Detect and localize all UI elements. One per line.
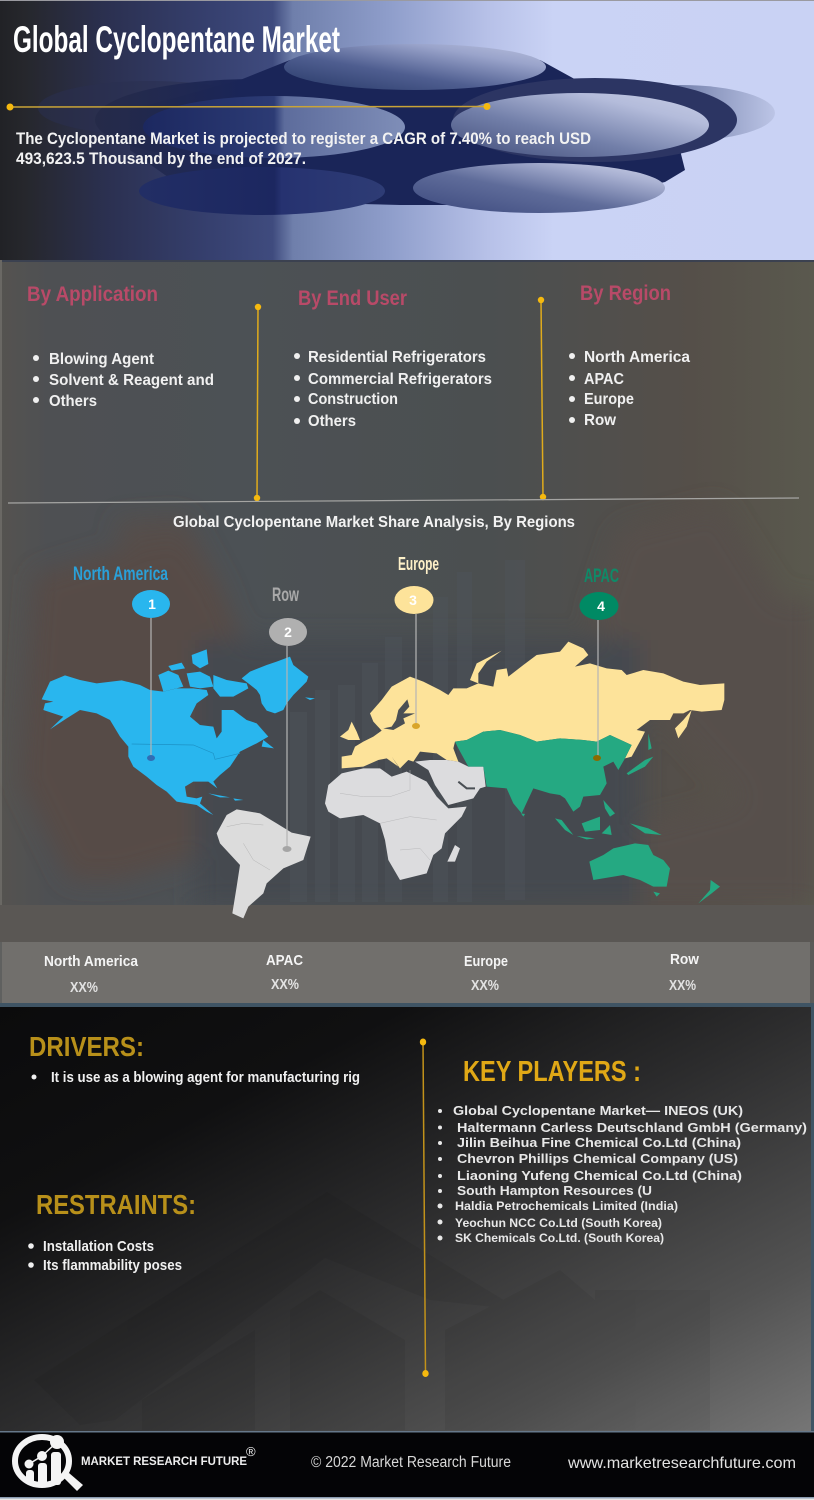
share: apac: XX%: [271, 976, 299, 993]
restraints: Installation Costs: [43, 1238, 154, 1255]
heading: by end user: By End User: [298, 287, 407, 310]
share: europe: XX%: [471, 977, 499, 994]
key players list: SK Chemicals Co.Ltd. (South Korea): [455, 1233, 664, 1245]
share: row: [669, 951, 699, 994]
panel: regional share strip: [0, 942, 814, 1007]
key players list: Chevron Phillips Chemical Company (US): [457, 1152, 738, 1166]
list: end user segments: [294, 349, 492, 430]
drivers: DRIVERS:: [29, 1031, 144, 1062]
share: apac: APAC: [266, 952, 303, 969]
share: europe: Europe: [464, 953, 508, 970]
key players list: Haltermann Carless Deutschland GmbH (Germany): [457, 1121, 807, 1135]
callout 4: apac: 4: [597, 598, 605, 614]
key players list: Global Cyclopentane Market— INEOS (UK): [453, 1104, 743, 1118]
share: apac: [266, 952, 303, 993]
share: row: Row: [670, 951, 699, 968]
molecule graphic: [38, 44, 775, 215]
panel: footer: [0, 1431, 814, 1500]
background photo: hands and bars: [0, 505, 814, 942]
map: south america: [217, 809, 311, 918]
registered mark: ®: [246, 1444, 256, 1459]
key players list: Yeochun NCC Co.Ltd (South Korea): [455, 1218, 662, 1230]
list: end user segments: Commercial Refrigerators: [308, 371, 492, 388]
panel: background photo section: [0, 260, 814, 1005]
heading: by application: By Application: [27, 283, 158, 306]
drivers: [29, 1031, 360, 1086]
callout 1: north america: 1: [148, 596, 156, 612]
map: asia pacific: [455, 730, 720, 903]
list: region segments: APAC: [584, 371, 624, 388]
callout 2: rest of world: Row: [272, 585, 299, 606]
list: application segments: Others: [49, 393, 97, 410]
intro text: The Cyclopentane Market is projected to register a CAGR of 7.40% to reach USD: [16, 130, 591, 148]
heading: by region: By Region: [580, 282, 671, 305]
map: europe and russia: [340, 642, 724, 768]
heading: market share analysis: Global Cyclopentane Market Share Analysis, By Regions: [173, 514, 575, 531]
panel: drivers, restraints and key players: [0, 1007, 814, 1432]
callout 1: north america: North America: [73, 564, 168, 585]
list: region segments: [569, 349, 690, 429]
share: row: XX%: [669, 977, 696, 994]
callout 4: apac: APAC: [584, 566, 619, 587]
callout 2: rest of world: 2: [284, 624, 292, 640]
drivers: It is use as a blowing agent for manufacturing rig: [51, 1069, 360, 1086]
key players list: South Hampton Resources (U: [457, 1184, 652, 1198]
panel: header banner: [0, 0, 814, 260]
intro text: [16, 130, 591, 168]
copyright: © 2022 Market Research Future: [311, 1454, 511, 1471]
callout 3: europe: 3: [409, 592, 417, 608]
restraints: [28, 1189, 196, 1274]
gold divider: [6, 103, 490, 110]
gold dividers between segment columns: [8, 297, 799, 503]
key players list: [438, 1104, 807, 1245]
chart: world map by region: [42, 554, 724, 918]
list: application segments: Blowing Agent: [49, 351, 154, 368]
title: Global Cyclopentane Market: [13, 19, 340, 60]
callout 3: europe: [394, 554, 439, 729]
key players heading: KEY PLAYERS :: [463, 1056, 641, 1088]
list: region segments: Row: [584, 412, 617, 429]
key players list: Liaoning Yufeng Chemical Co.Ltd (China): [457, 1169, 742, 1183]
list: end user segments: Residential Refrigerators: [308, 349, 486, 366]
list: region segments: North America: [584, 349, 690, 366]
key players list: Jilin Beihua Fine Chemical Co.Ltd (China): [457, 1136, 741, 1150]
callout 1: north america: [73, 564, 170, 761]
brand name: MARKET RESEARCH FUTURE: [81, 1454, 247, 1468]
share: north america: [44, 953, 139, 996]
list: end user segments: Others: [308, 413, 356, 430]
share: north america: North America: [44, 953, 139, 970]
list: region segments: Europe: [584, 391, 634, 408]
restraints: RESTRAINTS:: [36, 1189, 196, 1220]
logo mark: [15, 1435, 83, 1491]
callout 4: apac: [580, 566, 619, 761]
share: north america: XX%: [70, 979, 98, 996]
map: north america: [42, 649, 315, 815]
list: end user segments: Construction: [308, 391, 398, 408]
map: africa and middle east: [325, 760, 486, 880]
key players list: Haldia Petrochemicals Limited (India): [455, 1201, 678, 1213]
restraints: Its flammability poses: [43, 1257, 182, 1274]
list: application segments: Solvent & Reagent and: [49, 372, 214, 389]
intro text: 493,623.5 Thousand by the end of 2027.: [16, 150, 306, 168]
callout 2: rest of world: [269, 585, 307, 852]
share: europe: [464, 953, 508, 994]
website: www.marketresearchfuture.com: [567, 1455, 796, 1472]
gold divider: vertical: [420, 1038, 429, 1377]
list: application segments: [33, 351, 214, 410]
callout 3: europe: Europe: [398, 554, 439, 574]
